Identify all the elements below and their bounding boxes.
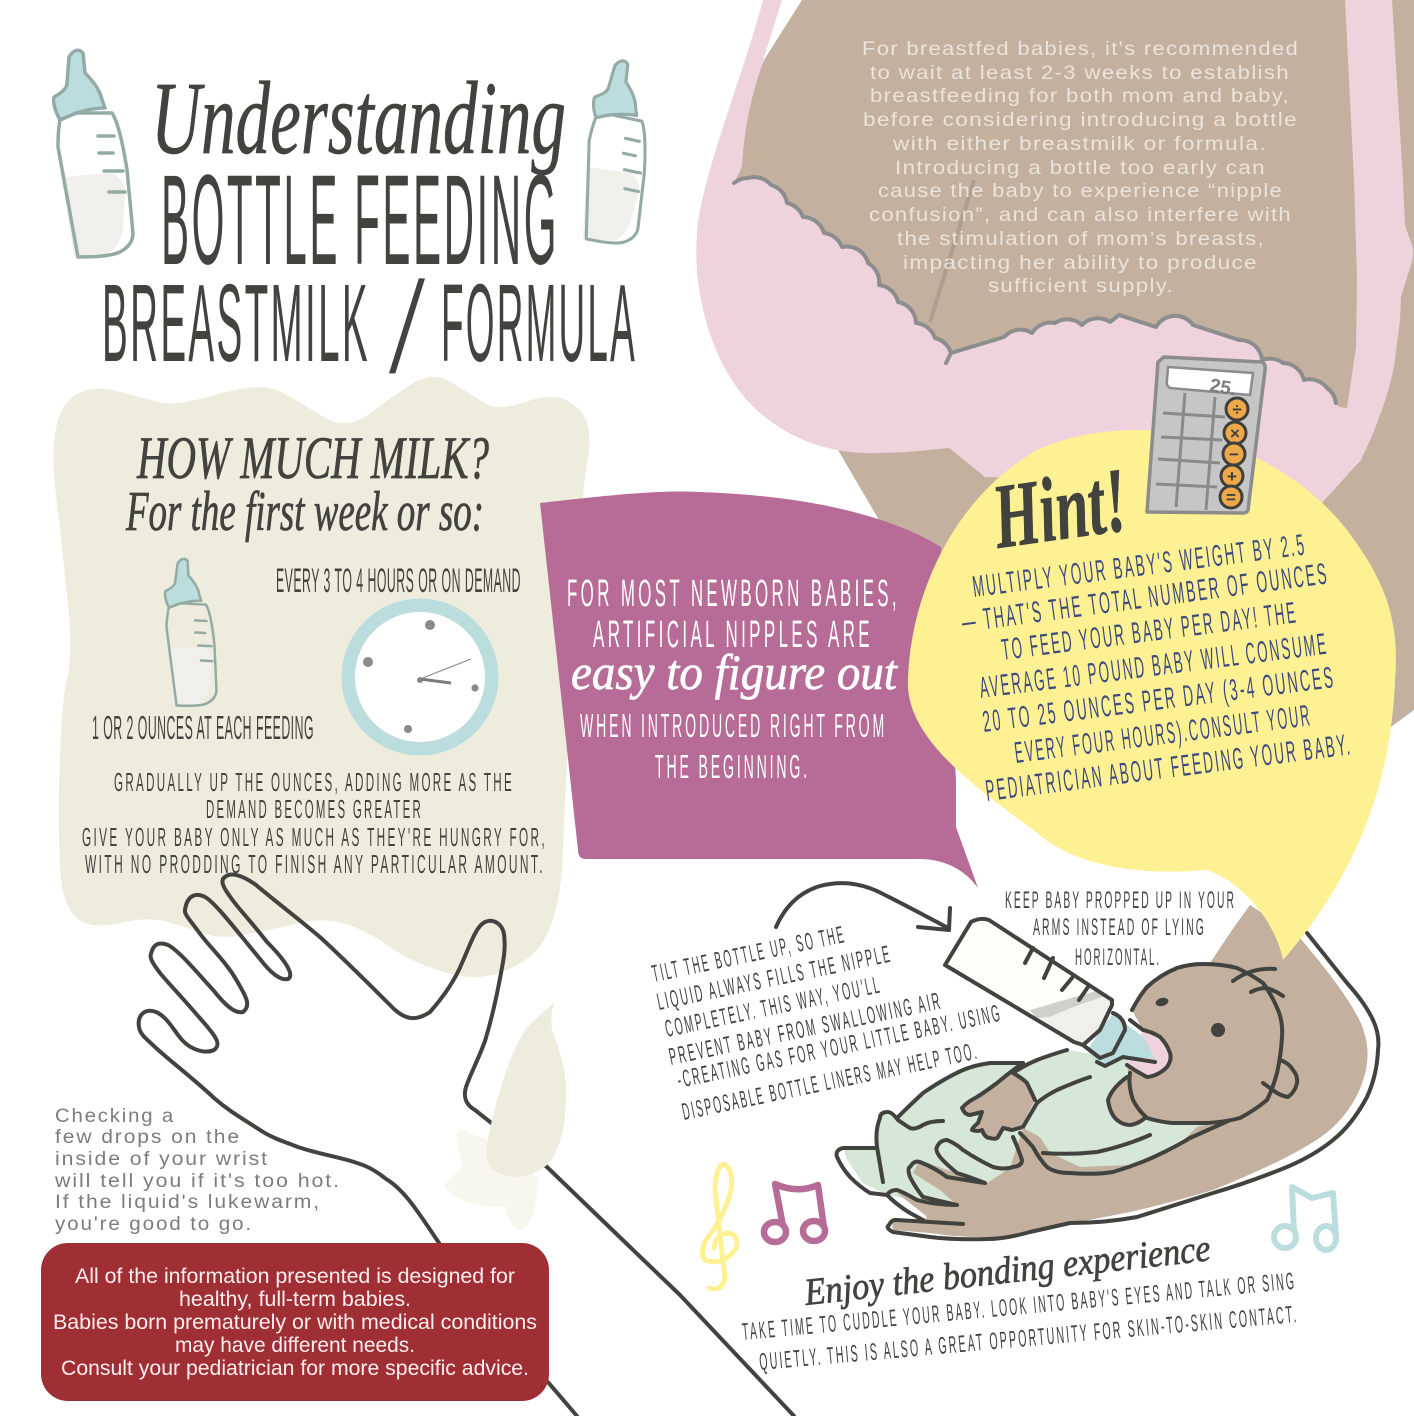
icon: pink music notes xyxy=(764,1184,825,1242)
panel: checking temperature text: inside of your wrist xyxy=(55,1149,269,1170)
icon: left baby bottle xyxy=(54,50,133,257)
text block: breastfed babies advice: with either breastmilk or formula. xyxy=(892,133,1267,155)
text: WITH NO PRODDING TO FINISH ANY PARTICULAR AMOUNT. xyxy=(85,849,545,879)
panel: disclaimer xyxy=(41,1243,549,1401)
illustration: hand outline xyxy=(139,875,794,1416)
text block: breastfed babies advice: before considering introducing a bottle xyxy=(863,109,1298,131)
illustration: milk drop and splash xyxy=(445,1002,566,1229)
icon: treble clef xyxy=(702,1164,737,1289)
text: GRADUALLY UP THE OUNCES, ADDING MORE AS THE xyxy=(114,767,514,797)
text block: tilt the bottle: TILT THE BOTTLE UP, SO THE xyxy=(650,921,848,988)
icon: calculator: 25. xyxy=(1208,375,1238,401)
text: 1 OR 2 OUNCES AT EACH FEEDING xyxy=(92,709,314,746)
panel: disclaimer: Babies born prematurely or with medical conditions xyxy=(53,1311,537,1334)
icon: teal music notes xyxy=(1274,1187,1336,1250)
panel: checking temperature text: If the liquid's lukewarm, xyxy=(55,1192,321,1213)
text block: keep baby propped up xyxy=(1005,887,1236,971)
icon: calculator: = xyxy=(1226,488,1236,507)
text block: breastfed babies advice: the stimulation of mom’s breasts, xyxy=(897,228,1265,250)
title xyxy=(102,61,637,403)
illustration: baby head xyxy=(1108,964,1297,1125)
text: -CREATING GAS FOR YOUR LITTLE BABY. USING xyxy=(675,1000,1004,1094)
panel: disclaimer: may have different needs. xyxy=(175,1334,415,1357)
heading: enjoy the bonding experience: Enjoy the bonding experience xyxy=(801,1227,1213,1314)
heading: how much milk: HOW MUCH MILK? xyxy=(136,425,489,491)
text block: breastfed babies advice: sufficient supply. xyxy=(988,275,1174,297)
text block: gradually up the ounces xyxy=(82,767,547,879)
icon: calculator: ÷ xyxy=(1232,400,1242,419)
panel: disclaimer: healthy, full-term babies. xyxy=(179,1288,411,1311)
heading: how much milk: For the first week or so: xyxy=(125,481,484,543)
panel: checking temperature text: will tell you if it's too hot. xyxy=(54,1171,341,1192)
text block: tilt the bottle: LIQUID ALWAYS FILLS THE NIPPLE xyxy=(655,941,894,1016)
text block: breastfed babies advice: to wait at least 2-3 weeks to establish xyxy=(870,62,1290,84)
icon: calculator xyxy=(1147,357,1265,513)
text block: breastfed babies advice: impacting her ability to produce xyxy=(903,252,1258,274)
callout: artificial nipples: FOR MOST NEWBORN BABIES, xyxy=(567,573,900,615)
illustration: arm cradling baby xyxy=(887,905,1378,1239)
text block: hint calculation xyxy=(960,529,1354,808)
panel: disclaimer: All of the information presented is designed for xyxy=(75,1265,515,1288)
illustration: baby body in green xyxy=(837,1050,1240,1205)
callout: artificial nipples xyxy=(540,492,978,888)
title: Understanding xyxy=(151,61,566,176)
text block: bonding advice xyxy=(741,1268,1299,1376)
text block: gradually up the ounces: DEMAND BECOMES GREATER xyxy=(206,794,423,824)
text block: keep baby propped up: HORIZONTAL. xyxy=(1075,944,1161,971)
title: / xyxy=(389,245,425,403)
text block: breastfed babies advice: breastfeeding for both mom and baby, xyxy=(870,85,1290,107)
panel: checking temperature text: Checking a xyxy=(55,1106,175,1127)
text: BOTTLE FEEDING xyxy=(161,149,559,292)
text block: breastfed babies advice: confusion”, and can also interfere with xyxy=(869,204,1292,226)
heading: how much milk xyxy=(125,425,489,543)
callout: hint bubble xyxy=(908,430,1396,960)
arrow: tilt direction xyxy=(776,883,950,930)
panel: how much milk background blob xyxy=(54,377,590,977)
icon: calculator: × xyxy=(1230,424,1240,443)
icon: small baby bottle xyxy=(159,558,223,708)
panel: checking temperature text xyxy=(54,1106,341,1235)
text block: breastfed babies advice xyxy=(862,38,1299,297)
text block: tilt the bottle xyxy=(650,921,1004,1126)
icon: calculator: − xyxy=(1229,445,1239,464)
text block: tilt the bottle: PREVENT BABY FROM SWALLOWING AIR xyxy=(667,988,944,1071)
text: DISPOSABLE BOTTLE LINERS MAY HELP TOO. xyxy=(680,1038,981,1126)
heading: hint: Hint! xyxy=(986,448,1133,568)
text block: tilt the bottle: COMPLETELY. THIS WAY, YOU'LL xyxy=(663,971,884,1043)
text: EVERY 3 TO 4 HOURS OR ON DEMAND xyxy=(276,562,521,600)
text: FORMULA xyxy=(441,262,637,385)
illustration: mother's torso and nursing bra xyxy=(696,0,1414,735)
panel: checking temperature text: you're good to go. xyxy=(55,1214,253,1235)
icon: clock xyxy=(342,598,498,756)
text: GIVE YOUR BABY ONLY AS MUCH AS THEY'RE HUNGRY FOR, xyxy=(82,822,547,852)
text block: breastfed babies advice: cause the baby to experience “nipple xyxy=(878,180,1283,202)
title: BREASTMILK xyxy=(102,262,370,385)
icon: right baby bottle xyxy=(565,57,671,249)
callout: artificial nipples: easy to figure out xyxy=(571,644,898,700)
text block: breastfed babies advice: Introducing a bottle too early can xyxy=(895,157,1266,179)
callout: artificial nipples: WHEN INTRODUCED RIGHT FROM xyxy=(580,707,887,744)
text block: breastfed babies advice: For breastfed babies, it's recommended xyxy=(862,38,1299,60)
callout: artificial nipples: THE BEGINNING. xyxy=(655,748,810,785)
callout: artificial nipples: ARTIFICIAL NIPPLES ARE xyxy=(593,614,873,656)
panel: disclaimer: Consult your pediatrician for more specific advice. xyxy=(61,1357,529,1380)
illustration: feeding bottle xyxy=(945,919,1172,1078)
icon: calculator: + xyxy=(1227,467,1237,486)
panel: checking temperature text: few drops on the xyxy=(55,1127,241,1148)
